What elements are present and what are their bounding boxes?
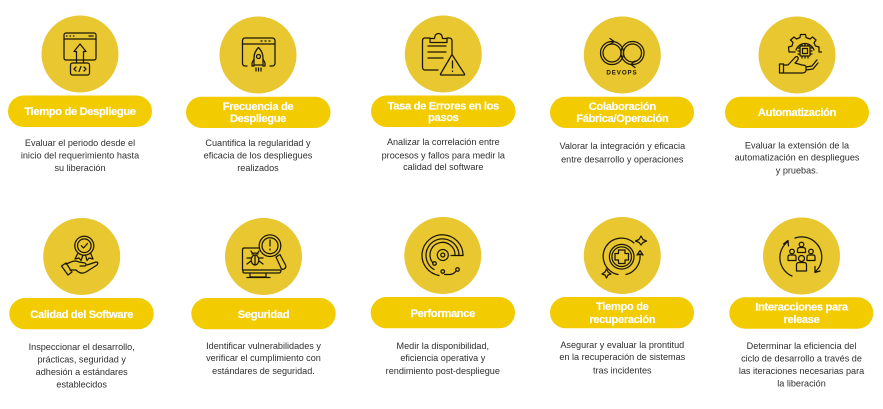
description: su liberación [54,163,106,173]
icon: browser with upload arrow and code [64,33,96,75]
title: Tiempo de [596,301,649,313]
icon: award over hand [62,236,98,275]
panel: Colaboración Fábrica/Operación [550,16,694,164]
description: eficiencia operativa y [400,353,486,363]
title pill [371,96,516,127]
title: Seguridad [238,309,290,321]
title pill [186,97,330,128]
icon circle: deployment [42,16,118,92]
description: realizados [237,163,279,173]
description: entre desarrollo y operaciones [561,154,684,164]
description: Evaluar el periodo desde el [25,138,135,148]
description: automatización en despliegues [735,152,860,162]
panel: Tiempo de Despliegue [8,16,152,173]
icon circle: security [225,218,302,295]
title pill [725,97,869,128]
title pill [191,298,336,329]
title: Interacciones para [755,302,849,314]
icon circle: rocket [220,16,296,94]
title: Automatización [758,107,837,119]
description: y pruebas. [776,165,818,175]
description: Asegurar y evaluar la prontitud [560,340,684,350]
description: Determinar la eficiencia del [747,341,856,351]
panel: Seguridad [191,218,336,376]
icon circle: iterations [763,218,840,294]
description: calidad del software [403,162,483,172]
description: Evaluar la extensión de la [745,140,850,150]
title: Tiempo de Despliegue [24,106,136,118]
icon: monitor, bug and magnifier [242,235,286,278]
title pill [8,96,152,127]
icon label: DEVOPS: DEVOPS [606,70,638,76]
icon: radar arcs with gear [422,235,463,276]
icon: devops loops [600,38,644,68]
description: verificar el cumplimiento con [206,353,321,363]
title: Tasa de Errores en los [388,100,499,112]
description: las iteraciones necesarias para [739,366,865,376]
icon circle: devops [584,16,661,94]
icon: gear, chip and robot hand [780,34,822,73]
title: Calidad del Software [30,309,133,321]
title: recuperación [589,314,656,326]
description: Identificar vulnerabilidades y [206,341,321,351]
icon: medical cross with rotating arrows [602,236,646,278]
description: eficacia de los despliegues [204,150,313,160]
title pill [550,297,694,328]
description: Analizar la correlación entre [387,137,500,147]
description: Inspeccionar el desarrollo, [29,342,135,352]
panel: Automatización [725,16,869,175]
icon circle: performance [404,217,481,294]
description: Cuantifica la regularidad y [205,138,311,148]
title: Despliegue [230,113,286,125]
description: en la recuperación de sistemas [559,352,686,362]
panel: Performance [371,217,515,376]
panel: Interacciones para release [729,218,873,389]
title pill [9,298,154,329]
description: la liberación [777,379,826,389]
description: ciclo de desarrollo a través de [741,354,862,364]
description: Medir la disponibilidad, [397,341,489,351]
icon circle: errors [405,16,482,92]
panel: Tasa de Errores en los pasos [371,16,516,172]
description: prácticas, seguridad y [37,354,126,364]
icon: team in a cycle [780,237,822,276]
title: Fábrica/Operación [576,113,669,125]
description: estándares de seguridad. [212,366,315,376]
title: Performance [411,308,475,320]
title pill [550,97,694,128]
panel: Frecuencia de Despliegue [186,16,330,173]
description: tras incidentes [593,365,652,375]
panel: Tiempo de recuperación [550,217,694,375]
panel: Calidad del Software [9,218,154,389]
icon circle: automation [758,16,836,94]
description: Valorar la integración y eficacia [559,141,686,151]
title pill [371,297,515,328]
icon: browser with rocket [242,38,275,71]
description: procesos y fallos para medir la [382,150,506,160]
description: inicio del requerimiento hasta [21,150,140,160]
description: establecidos [56,379,107,389]
icon circle: quality [43,218,120,295]
description: adhesión a estándares [36,367,128,377]
title pill [729,297,873,329]
icon: clipboard with warning [422,34,465,75]
title: Frecuencia de [223,101,293,113]
title: release [783,314,820,326]
icon circle: recovery [584,217,661,294]
description: rendimiento post-despliegue [386,366,500,376]
title: Colaboración [589,101,656,113]
title: pasos [428,112,459,124]
